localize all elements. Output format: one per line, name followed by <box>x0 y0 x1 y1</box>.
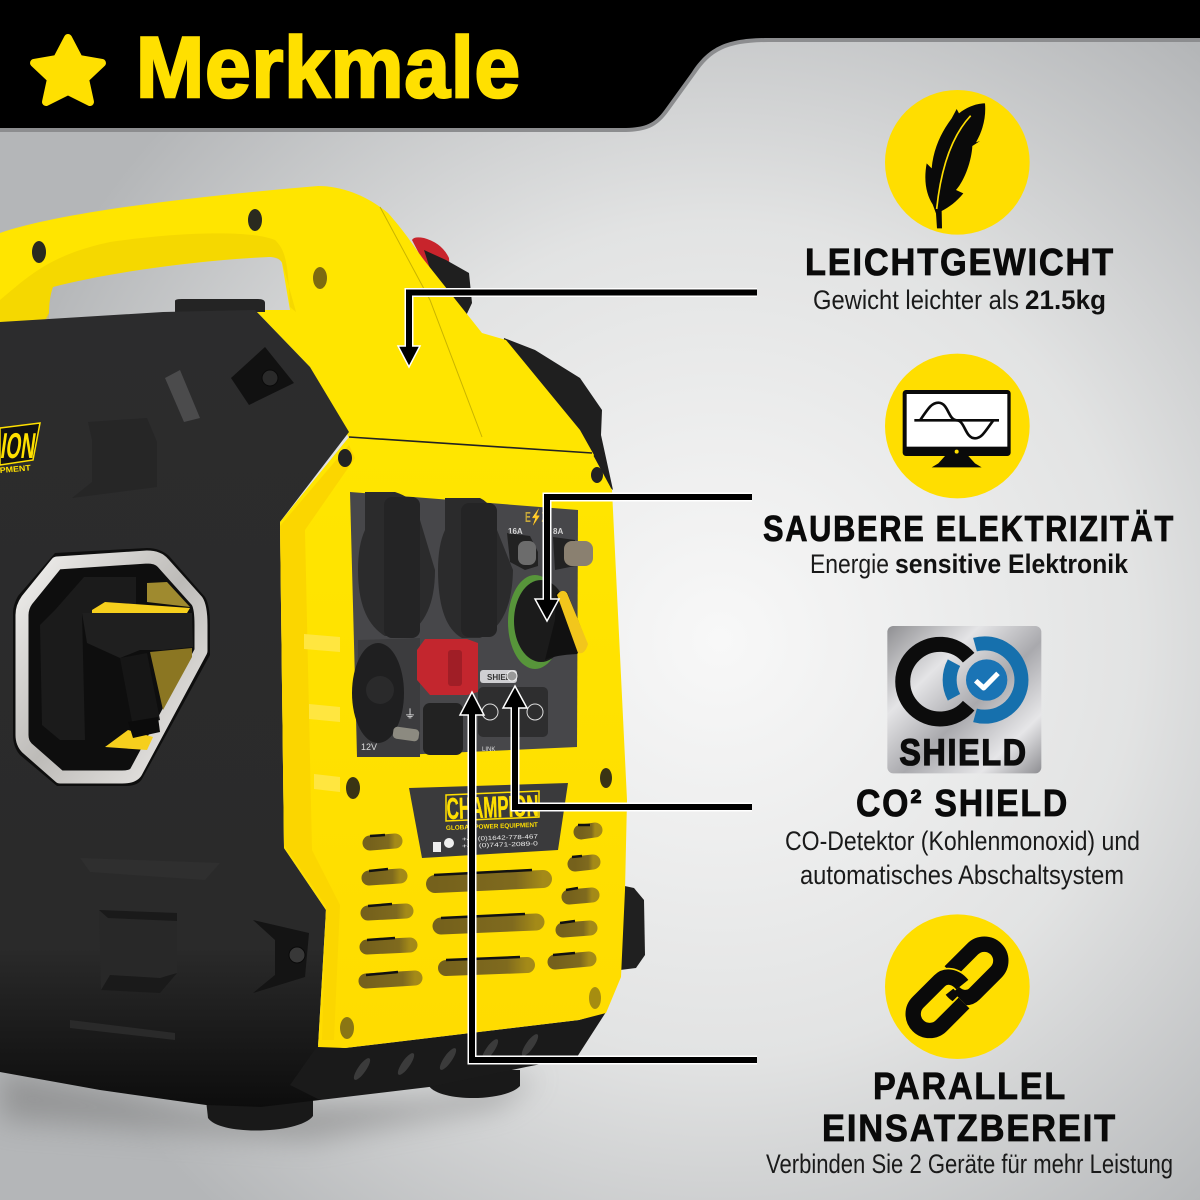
heading: PARALLEL <box>873 1066 1067 1108</box>
filler cap <box>175 299 265 312</box>
arrow: parallel <box>460 692 757 1060</box>
feature: parallel ready <box>766 914 1173 1179</box>
side body relief <box>70 347 309 1040</box>
header banner <box>0 0 1200 128</box>
red button <box>412 237 450 275</box>
control panel: LINK <box>482 747 495 753</box>
shield label <box>480 670 517 683</box>
arrow: lightweight <box>398 292 757 367</box>
12V socket and earth terminal: ⏚ <box>404 707 416 721</box>
rating plate: GLOBAL POWER EQUIPMENT <box>446 822 538 832</box>
circuit breakers <box>507 533 593 570</box>
rear dark housing <box>424 250 613 490</box>
12V socket and earth terminal <box>352 643 420 752</box>
icon: feather <box>885 90 1030 235</box>
generator illustration <box>0 186 645 1140</box>
breaker labels: 8A <box>553 527 563 536</box>
description <box>810 549 1129 579</box>
description: Energie <box>810 549 889 579</box>
description <box>785 826 1140 890</box>
description: sensitive Elektronik <box>895 549 1129 579</box>
rating plate: CHAMPION <box>446 790 539 826</box>
description: automatisches Abschaltsystem <box>800 860 1124 890</box>
side tabs <box>304 634 340 792</box>
shield label: SHIELD <box>487 673 517 682</box>
description: Gewicht leichter als <box>813 285 1019 315</box>
title: Merkmale <box>136 20 521 116</box>
yellow front panel <box>32 209 627 1048</box>
breaker labels: 16A <box>508 527 523 536</box>
heading: EINSATZBEREIT <box>822 1108 1117 1150</box>
black side body <box>0 310 349 1107</box>
control panel <box>350 492 593 757</box>
lower front black trim <box>290 1012 606 1100</box>
brand logo on side <box>0 423 40 475</box>
arrow: clean electricity <box>535 497 752 621</box>
engine switch knob <box>508 575 588 669</box>
icon: chain link <box>885 914 1030 1059</box>
shell seam <box>380 207 482 437</box>
vent holes in trim <box>351 1032 541 1082</box>
description: 21.5kg <box>1025 285 1106 315</box>
screws <box>32 209 612 1039</box>
feet <box>206 1070 520 1131</box>
icon: monitor <box>885 354 1030 498</box>
icon: CO shield badge: SHIELD <box>899 731 1028 773</box>
eco plate <box>478 687 548 737</box>
feature: lightweight <box>805 90 1115 315</box>
brand logo on side: PMENT <box>0 463 31 475</box>
description: CO-Detektor (Kohlenmonoxid) und <box>785 826 1140 856</box>
red fuel switch <box>417 639 478 695</box>
rating plate <box>409 783 568 858</box>
handle shading <box>0 233 296 335</box>
feature: CO shield <box>785 626 1140 890</box>
ventilation slots <box>366 825 595 981</box>
rating plate: +49 (0)7471-2089-0 <box>462 841 539 850</box>
rating plate: +44 (0)1642-778-467 <box>462 834 539 843</box>
arrow: CO shield <box>503 686 752 807</box>
feature: clean electricity <box>763 354 1175 579</box>
recoil starter window <box>13 548 210 786</box>
heading <box>822 1066 1117 1150</box>
rear bump <box>620 885 645 970</box>
brand logo on side: ION <box>0 425 38 466</box>
heading: LEICHTGEWICHT <box>805 242 1115 284</box>
breaker labels: E⚡Z <box>525 508 547 526</box>
handle and yellow top shell <box>0 186 594 700</box>
black lower switch <box>423 703 463 755</box>
icon: star <box>34 38 102 102</box>
socket covers <box>358 492 513 638</box>
heading: CO² SHIELD <box>856 783 1069 825</box>
floor shadow <box>0 1070 540 1140</box>
breaker labels <box>508 508 563 536</box>
icon: CO shield badge <box>887 626 1041 773</box>
12V socket and earth terminal: 12V <box>361 742 377 752</box>
